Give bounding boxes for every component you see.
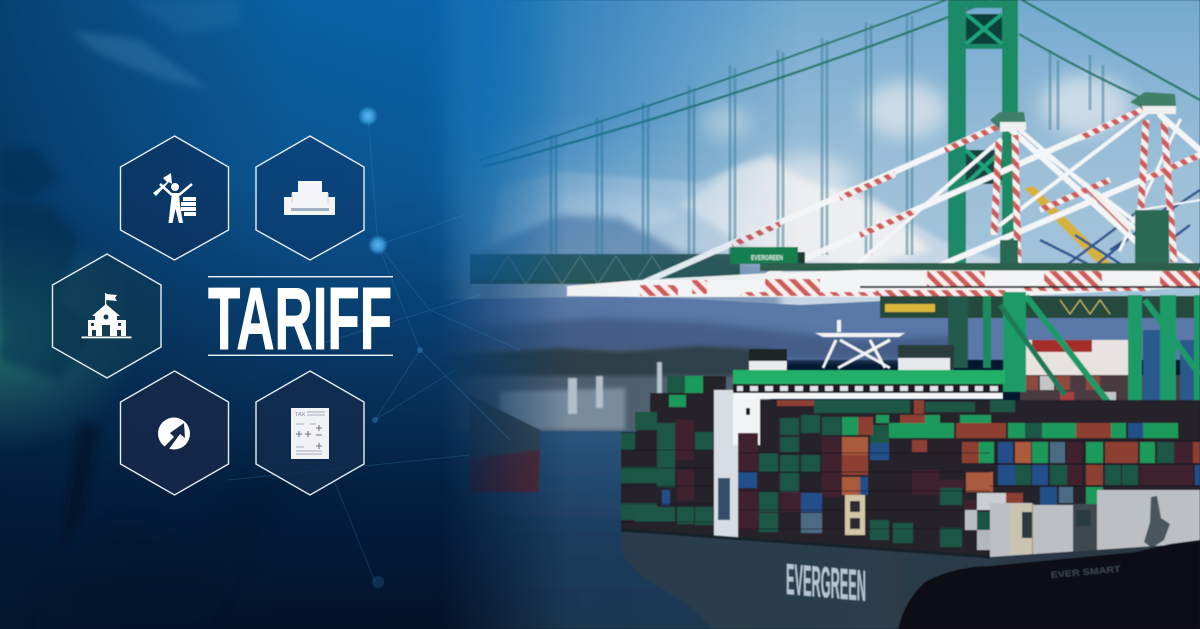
yellow and blue boom xyxy=(1024,186,1116,268)
distant dock and containers behind ship xyxy=(1020,330,1200,433)
bridge tower xyxy=(948,0,1018,285)
background vessel xyxy=(470,395,540,492)
ship accommodation block xyxy=(714,370,1005,537)
crane machinery cabins xyxy=(1000,210,1169,270)
icon: fax printer xyxy=(284,181,335,215)
hexagon: government building xyxy=(52,254,161,378)
icon: person lifting arrow with coins xyxy=(153,173,196,223)
crane deck xyxy=(567,263,1200,297)
sky xyxy=(420,0,1200,340)
container stacks base xyxy=(621,376,1200,558)
clouds and snowy mountains xyxy=(420,75,1200,360)
hexagon: tax form xyxy=(256,371,364,495)
containers: blue xyxy=(662,423,1200,512)
green truck on crane xyxy=(730,247,805,264)
hexagon: printer xyxy=(256,136,364,260)
icon: school with flag xyxy=(82,293,132,338)
suspension bridge hangers xyxy=(551,14,1103,255)
bridge deck truss xyxy=(470,254,740,284)
containers: dark green xyxy=(621,376,1174,547)
icon: tax document: TAX xyxy=(295,412,306,418)
blue rigging behind crane xyxy=(1040,190,1200,270)
distant hills xyxy=(420,295,1200,360)
crane booms xyxy=(645,108,1200,282)
ship funnel and mast xyxy=(749,320,954,372)
crane striped legs xyxy=(994,120,1174,268)
ship hull xyxy=(621,530,1200,629)
hexagon: growth person with coins xyxy=(120,136,228,260)
far shoreline city xyxy=(430,346,770,434)
blue haze over sky xyxy=(442,0,781,280)
faint world map silhouette xyxy=(0,0,280,629)
suspension bridge cables xyxy=(480,0,1200,167)
green truck on crane: EVERGREEN xyxy=(751,253,783,262)
containers: steel and pale xyxy=(801,442,1073,533)
icon: arrow in circle xyxy=(158,418,190,450)
container row gaps xyxy=(621,441,1200,529)
red striped boom sections xyxy=(732,108,1200,245)
containers: orange xyxy=(842,437,1031,495)
crane legs below deck xyxy=(948,292,1200,423)
containers: rust red xyxy=(777,400,1200,510)
crane apex machinery xyxy=(990,92,1176,132)
hull shadow xyxy=(898,540,1200,629)
pale block containers and lashing bridges xyxy=(845,490,1200,557)
containers: maroon xyxy=(675,420,1193,530)
containers: bright green xyxy=(669,376,1178,505)
title: TARIFF: TARIFF xyxy=(208,269,392,368)
hexagon: upward arrow xyxy=(120,371,228,495)
ship name on bow: EVER SMART xyxy=(1050,564,1121,580)
crane substructure xyxy=(880,296,1200,318)
network lines and nodes xyxy=(228,106,520,588)
water xyxy=(420,431,800,629)
teal glow xyxy=(0,215,140,455)
ship hull: EVERGREEN xyxy=(786,555,866,611)
left blue background panel xyxy=(0,0,800,629)
photo: port with bridge, cranes and container ship xyxy=(420,0,1200,629)
